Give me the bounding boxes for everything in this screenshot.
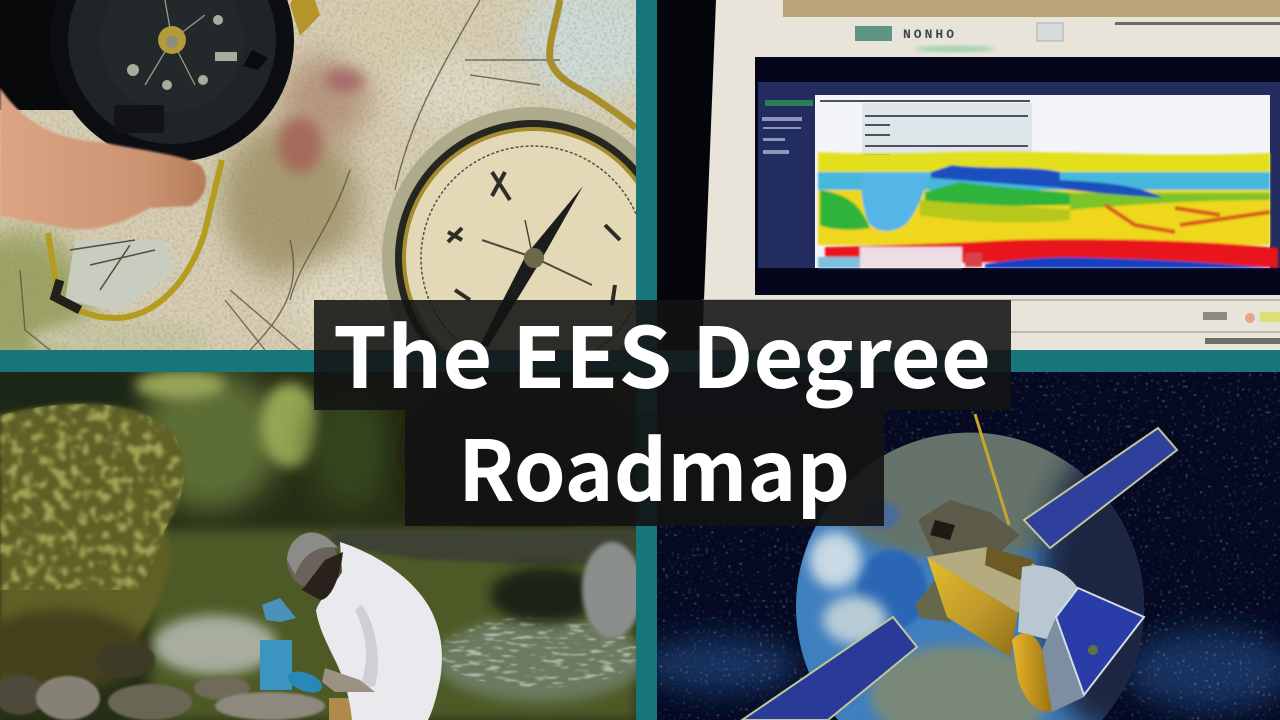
starfield <box>640 372 1280 720</box>
printed strip with label <box>783 0 1280 52</box>
dark backdrop <box>657 0 716 350</box>
sample bottle <box>260 640 292 690</box>
icon: black compass <box>0 0 320 162</box>
panel: river field sampling photo <box>0 360 645 720</box>
title line 1: The EES Degree <box>333 292 991 413</box>
title line 2: Roadmap <box>458 405 850 526</box>
scientist in white <box>260 532 442 720</box>
title backing: line 1 <box>314 300 1011 410</box>
head <box>287 532 337 588</box>
sidebar lines <box>762 100 813 154</box>
lower bezel markings <box>702 300 1280 332</box>
icon: folding lens frame <box>48 160 222 318</box>
title backing: line 2 <box>405 410 884 526</box>
cross-section colour bands <box>818 152 1278 268</box>
title <box>314 292 1011 526</box>
antenna <box>975 414 1009 525</box>
software window <box>815 95 1270 268</box>
upper face <box>927 547 1050 613</box>
blue dish <box>288 672 322 692</box>
solar panel lower <box>742 617 917 720</box>
icon: brass compass <box>382 0 636 350</box>
arm <box>322 668 375 692</box>
gold side <box>927 557 1018 657</box>
panel: monitor with geological cross-section <box>657 0 1280 350</box>
sunlit foliage <box>0 404 184 692</box>
Earth <box>796 432 1144 720</box>
trousers <box>329 698 352 720</box>
map background <box>0 0 660 370</box>
screen <box>755 57 1280 295</box>
cap <box>1018 566 1078 640</box>
river <box>150 530 645 720</box>
panel: satellite over Earth <box>640 372 1280 720</box>
gold end <box>1012 633 1052 712</box>
panel: map and compasses photo <box>0 0 636 350</box>
blue end panel <box>1056 588 1144 695</box>
lab coat <box>316 542 442 720</box>
satellite body <box>915 500 1144 712</box>
rocks <box>0 642 325 720</box>
instruments cluster <box>918 500 1020 558</box>
printed strip with label: NONHO <box>903 27 957 42</box>
monitor bezel <box>702 0 1280 350</box>
forest background <box>0 360 640 720</box>
icon: hand <box>0 88 206 229</box>
solar panel upper <box>1024 428 1177 548</box>
side plate <box>1042 617 1084 712</box>
